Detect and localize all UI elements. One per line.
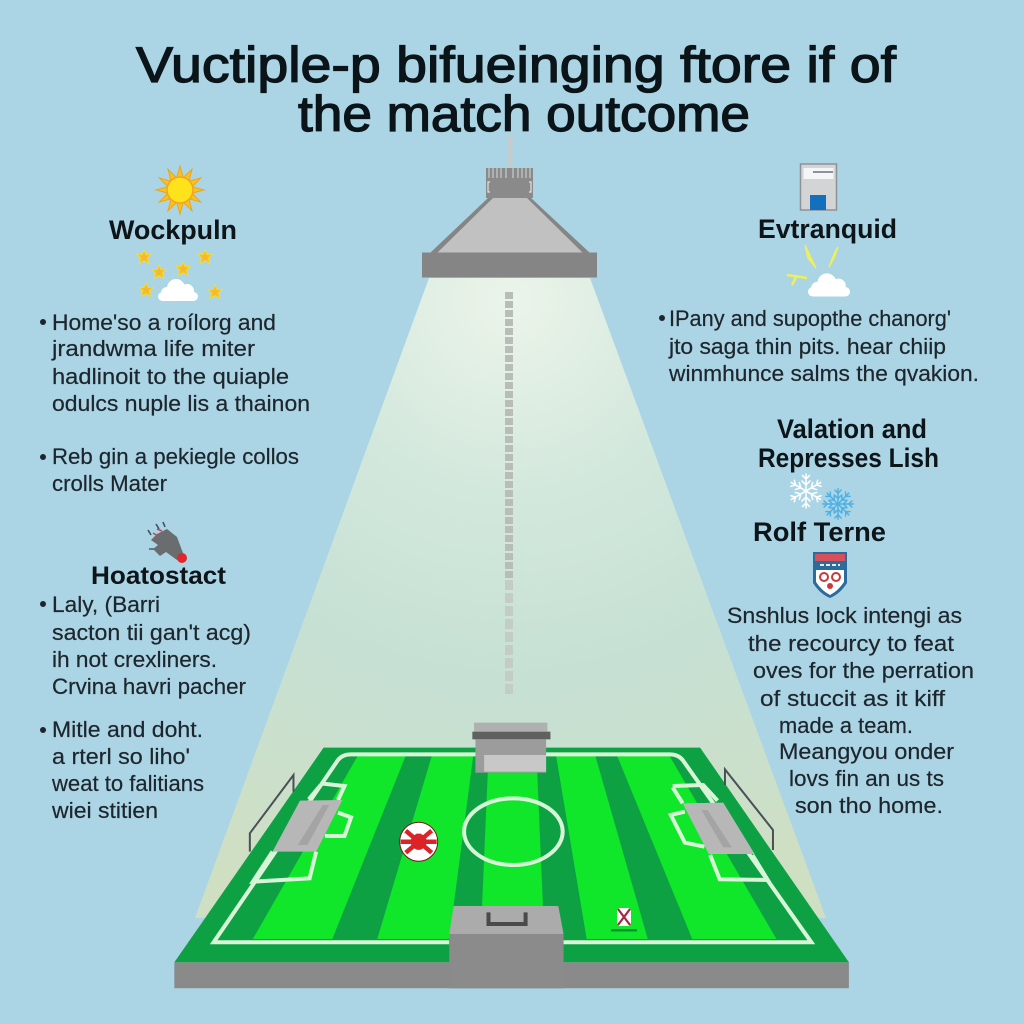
text block: left top paragraph: hadlinoit to the quiaple	[52, 364, 289, 389]
left bench	[273, 800, 342, 852]
icon: document card	[800, 164, 836, 210]
text block: left top paragraph: Reb gin a pekiegle collos	[52, 444, 299, 469]
text block: left bottom paragraph: a rterl so liho'	[52, 744, 190, 769]
heading: Rolf Terne: Rolf Terne	[753, 517, 886, 547]
text block: left bottom paragraph: Mitle and doht.	[52, 717, 203, 742]
text block: right bottom paragraph	[727, 603, 974, 818]
text block: right bottom paragraph: Snshlus lock intengi as	[727, 603, 962, 628]
pitch base	[174, 962, 849, 988]
panel: left top	[40, 166, 310, 496]
text block: right top paragraph: jto saga thin pits. hear chiip	[668, 334, 946, 359]
heading: Evtranquid: Evtranquid	[758, 214, 897, 244]
text block: left top paragraph: jrandwma life miter	[51, 336, 255, 361]
text block: right top paragraph	[659, 306, 979, 386]
text block: left bottom paragraph: Laly, (Barri	[52, 592, 160, 617]
text block: right bottom paragraph: son tho home.	[795, 793, 943, 818]
near stand	[449, 906, 564, 988]
icon: shield crest	[813, 552, 847, 598]
text block: right bottom paragraph: the recourcy to feat	[748, 631, 954, 656]
text block: left bottom paragraph: wiei stitien	[51, 798, 158, 823]
icon: snowflakes	[789, 474, 853, 519]
left goal net	[250, 775, 293, 852]
title: the match outcome	[298, 86, 750, 142]
right goal net	[725, 769, 773, 850]
light beam	[195, 278, 826, 918]
panel: right top	[659, 164, 979, 386]
text block: left top paragraph: crolls Mater	[52, 471, 167, 496]
central dashed light strip	[505, 292, 513, 694]
heading: Hoatostact: Hoatostact	[91, 562, 227, 590]
text block: right bottom paragraph: Meangyou onder	[779, 739, 954, 764]
text block: left bottom paragraph	[40, 592, 251, 823]
text block: right bottom paragraph: of stuccit as it kiff	[760, 686, 946, 711]
title	[136, 37, 896, 142]
icon: sun rays and cloud	[787, 245, 850, 296]
icon: sun	[156, 166, 204, 214]
text block: left bottom paragraph: Crvina havri pacher	[52, 674, 246, 699]
text block: left bottom paragraph: sacton tii gan't acg)	[52, 620, 251, 645]
pitch markings	[214, 754, 811, 942]
panel: right bottom	[727, 414, 974, 818]
far stand	[472, 723, 550, 773]
text block: right bottom paragraph: made a team.	[779, 713, 913, 738]
floodlight lamp	[422, 135, 597, 278]
text block: left bottom paragraph: weat to falitians	[51, 771, 204, 796]
pitch surface	[174, 748, 849, 962]
title: Vuctiple-p bifueinging ftore if of	[136, 37, 896, 93]
text block: left top paragraph: Home'so a roílorg and	[52, 310, 276, 335]
football	[400, 822, 438, 861]
icon: hand	[148, 522, 187, 563]
text block: left bottom paragraph: ih not crexliners.	[52, 647, 217, 672]
right bench	[683, 803, 755, 854]
text block: right top paragraph: IPany and supopthe chanorg'	[669, 306, 951, 331]
text block: left top paragraph	[40, 310, 310, 496]
icon: stars and cloud	[137, 250, 222, 301]
heading: Wockpuln: Wockpuln	[109, 215, 237, 245]
football pitch	[174, 723, 849, 988]
text block: left top paragraph: odulcs nuple lis a thainon	[52, 391, 310, 416]
text block: right bottom paragraph: oves for the perration	[753, 658, 974, 683]
heading: Valation and Represses Lish: Represses Lish	[758, 443, 939, 473]
heading: Valation and Represses Lish: Valation and	[777, 414, 927, 444]
panel: left bottom	[40, 522, 251, 823]
heading: Valation and Represses Lish	[758, 414, 939, 473]
small team emblem	[611, 908, 637, 932]
mowing stripes	[253, 756, 776, 939]
text block: right bottom paragraph: lovs fin an us ts	[789, 766, 944, 791]
text block: right top paragraph: winmhunce salms the qvakion.	[668, 361, 979, 386]
